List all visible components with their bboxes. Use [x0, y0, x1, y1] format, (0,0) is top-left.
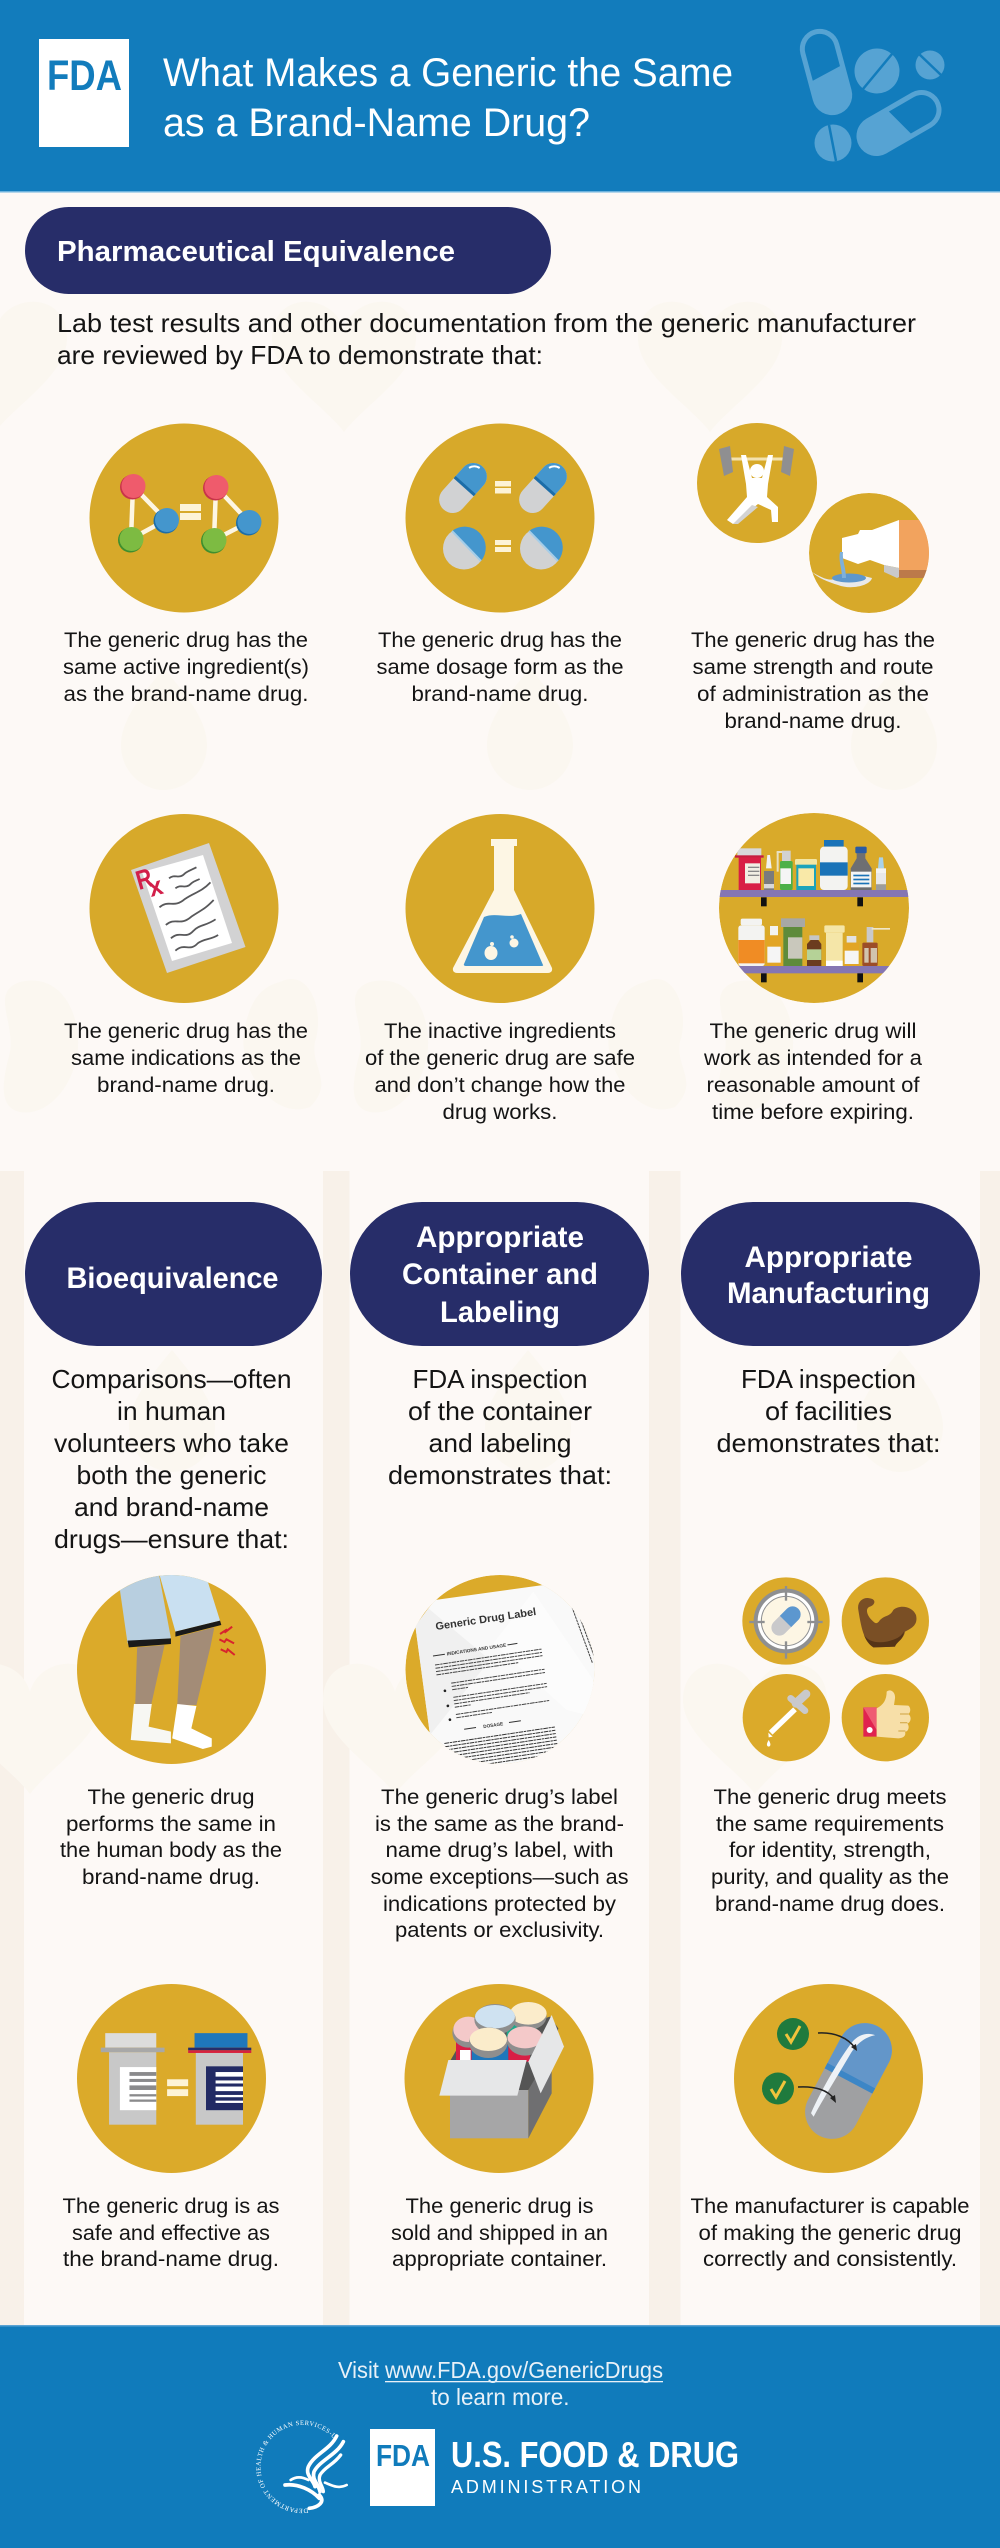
- caption: strength and route: [691, 629, 935, 733]
- caption: quality: [711, 1786, 949, 1916]
- intro: container and labeling: of the container: [408, 1396, 592, 1426]
- icon: dropper: [743, 1674, 830, 1761]
- icon: capsules and tablets: [406, 424, 594, 612]
- caption: label: is the same as the brand-: [375, 1813, 624, 1836]
- caption: quality: for identity, strength,: [729, 1839, 931, 1862]
- heading: container and labeling: Container and: [402, 1258, 598, 1291]
- intro: bioequivalence: and brand-name: [74, 1492, 269, 1522]
- caption: strength and route: same strength and route: [692, 656, 934, 679]
- caption: manufacturer: [690, 2195, 970, 2271]
- FDA logo box: [39, 39, 129, 147]
- column watermark: [323, 1350, 571, 1794]
- intro: bioequivalence: both the generic: [76, 1460, 266, 1490]
- caption: dosage form: [376, 629, 624, 706]
- caption: expiry: The generic drug will: [710, 1020, 916, 1043]
- agency name: [451, 2434, 739, 2497]
- caption: label: The generic drug’s label: [381, 1786, 618, 1809]
- heading: manufacturing: [681, 1202, 980, 1346]
- intro text: [57, 308, 916, 370]
- icon: thumbs up: [842, 1674, 929, 1761]
- caption: quality: purity, and quality as the: [711, 1866, 949, 1889]
- intro: container and labeling: and labeling: [428, 1428, 572, 1458]
- call to action: Visit www.FDA.gov/GenericDrugs: [338, 2357, 663, 2383]
- caption: quality: The generic drug meets: [714, 1786, 946, 1809]
- heading: container and labeling: Labeling: [440, 1296, 560, 1329]
- watermark pattern: upper section: [0, 302, 937, 1112]
- caption: performance: brand-name drug.: [82, 1866, 260, 1889]
- caption: label: patents or exclusivity.: [395, 1919, 604, 1942]
- icon: drug label document: DOSAGE: [483, 1721, 503, 1729]
- FDA logo box: FDA: [376, 2438, 430, 2473]
- icon: prescription pad: R: [132, 863, 156, 896]
- call to action: [338, 2357, 663, 2410]
- caption: expiry: time before expiring.: [712, 1101, 914, 1124]
- caption: active ingredient: [63, 629, 309, 706]
- intro: bioequivalence: volunteers who take: [54, 1428, 289, 1458]
- caption: strength and route: of administration as the: [697, 683, 929, 706]
- caption: expiry: work as intended for a: [703, 1047, 922, 1070]
- intro text: Lab test results and other documentation from the generic manufacturer: [57, 308, 916, 338]
- caption: expiry: reasonable amount of: [706, 1074, 920, 1097]
- caption: inactive ingredients: of the generic drug are safe: [365, 1047, 635, 1070]
- icon: flexed arm: [842, 1577, 929, 1665]
- intro: bioequivalence: drugs—ensure that:: [54, 1524, 289, 1554]
- icon: prescription pad: x: [144, 870, 167, 903]
- caption: safety: [62, 2195, 280, 2271]
- icon: identity, strength, purity, quality: [742, 1577, 929, 1761]
- intro: container and labeling: [388, 1364, 612, 1490]
- caption: label: name drug’s label, with: [386, 1839, 614, 1862]
- caption: active ingredient: same active ingredient(s): [63, 656, 309, 679]
- caption: performance: The generic drug: [88, 1786, 254, 1809]
- heading: container and labeling: [350, 1202, 649, 1346]
- title: as a Brand-Name Drug?: [163, 101, 590, 145]
- caption: inactive ingredients: drug works.: [442, 1101, 558, 1124]
- panel: container and labeling column: [323, 1171, 649, 2325]
- caption: dosage form: The generic drug has the: [378, 629, 622, 652]
- caption: label: some exceptions—such as: [370, 1866, 628, 1889]
- heading: manufacturing: Appropriate: [744, 1241, 912, 1274]
- FDA logo box: FDA: [47, 52, 122, 100]
- panel: pharmaceutical equivalence heading: [25, 207, 551, 294]
- FDA logo box: [370, 2429, 435, 2506]
- caption: manufacturer: of making the generic drug: [698, 2222, 962, 2245]
- caption: container: [391, 2195, 608, 2271]
- icon: liquid pouring into spoon: [809, 493, 931, 613]
- heading: bioequivalence: [25, 1202, 322, 1346]
- caption: safety: safe and effective as: [72, 2222, 270, 2245]
- intro: manufacturing: [716, 1364, 940, 1458]
- caption: inactive ingredients: and don’t change how the: [374, 1074, 626, 1097]
- heading: manufacturing: Manufacturing: [727, 1277, 930, 1310]
- caption: indications: [64, 1020, 308, 1097]
- call to action: to learn more.: [431, 2384, 570, 2410]
- icon: capsule with check marks: [734, 1984, 923, 2173]
- panel: pharmaceutical equivalence heading: Pharmaceutical Equivalence: [57, 236, 455, 268]
- intro: container and labeling: FDA inspection: [412, 1364, 588, 1394]
- caption: safety: the brand-name drug.: [63, 2248, 279, 2271]
- caption: strength and route: brand-name drug.: [724, 710, 902, 733]
- icon: drug label document: [406, 1575, 594, 1764]
- title: What Makes a Generic the Same: [163, 51, 733, 95]
- panel: manufacturing column: [680, 1171, 980, 2325]
- title: [163, 51, 733, 145]
- icon: legs with knee pain: [77, 1570, 266, 1764]
- intro: container and labeling: demonstrates that:: [388, 1460, 612, 1490]
- icon: molecules: [90, 424, 278, 612]
- icon: medicine shelves: [717, 813, 913, 1003]
- HHS seal: [256, 2420, 348, 2514]
- caption: label: [370, 1786, 628, 1942]
- icon: prescription pad: [90, 814, 278, 1003]
- intro: manufacturing: of facilities: [765, 1396, 892, 1426]
- header band: [0, 0, 1000, 192]
- intro: bioequivalence: Comparisons—often: [52, 1364, 292, 1394]
- icon: matching pill bottles: [77, 1984, 266, 2173]
- intro: manufacturing: FDA inspection: [741, 1364, 916, 1394]
- icon: drug label document: INDICATIONS AND USAGE: [446, 1643, 507, 1656]
- caption: indications: brand-name drug.: [97, 1074, 275, 1097]
- caption: active ingredient: The generic drug has the: [64, 629, 308, 652]
- column watermark: [683, 1350, 943, 1794]
- intro: bioequivalence: in human: [117, 1396, 226, 1426]
- caption: dosage form: same dosage form as the: [376, 656, 624, 679]
- agency name: U.S. FOOD & DRUG: [451, 2434, 739, 2475]
- agency name: ADMINISTRATION: [451, 2477, 641, 2497]
- caption: performance: [60, 1786, 282, 1889]
- caption: safety: The generic drug is as: [62, 2195, 280, 2218]
- caption: dosage form: brand-name drug.: [412, 683, 588, 706]
- intro text: are reviewed by FDA to demonstrate that:: [57, 340, 543, 370]
- icon: box of bottles: [404, 1984, 594, 2173]
- caption: container: sold and shipped in an: [391, 2222, 608, 2245]
- caption: quality: brand-name drug does.: [715, 1893, 945, 1916]
- heading: container and labeling: Appropriate: [416, 1221, 584, 1254]
- icon: flask: [406, 814, 594, 1003]
- heading: bioequivalence: Bioequivalence: [66, 1262, 278, 1295]
- intro: bioequivalence: [52, 1364, 292, 1554]
- intro: manufacturing: demonstrates that:: [716, 1428, 940, 1458]
- caption: strength and route: The generic drug has the: [691, 629, 935, 652]
- HHS seal: DEPARTMENT OF HEALTH & HUMAN SERVICES-USA: [256, 2420, 335, 2514]
- icon: drug label document: Generic Drug Label: [435, 1606, 537, 1633]
- column watermark: [0, 1350, 215, 1794]
- caption: quality: the same requirements: [716, 1813, 944, 1836]
- caption: expiry: [703, 1020, 922, 1124]
- lower section background: [0, 1171, 1000, 2325]
- icon: weightlifter: [697, 423, 817, 543]
- caption: container: appropriate container.: [392, 2248, 607, 2271]
- caption: manufacturer: correctly and consistently.: [703, 2248, 957, 2271]
- icon: pills: [795, 24, 949, 163]
- caption: indications: The generic drug has the: [64, 1020, 308, 1043]
- caption: manufacturer: The manufacturer is capable: [690, 2195, 970, 2218]
- caption: label: indications protected by: [383, 1893, 617, 1916]
- panel: bioequivalence column: [0, 1171, 323, 2325]
- caption: inactive ingredients: The inactive ingredients: [384, 1020, 616, 1043]
- caption: inactive ingredients: [365, 1020, 635, 1124]
- caption: container: The generic drug is: [406, 2195, 594, 2218]
- caption: indications: same indications as the: [71, 1047, 301, 1070]
- caption: performance: performs the same in: [66, 1813, 276, 1836]
- icon: target on capsule: [742, 1577, 830, 1665]
- caption: active ingredient: as the brand-name drug.: [64, 683, 308, 706]
- caption: performance: the human body as the: [60, 1839, 282, 1862]
